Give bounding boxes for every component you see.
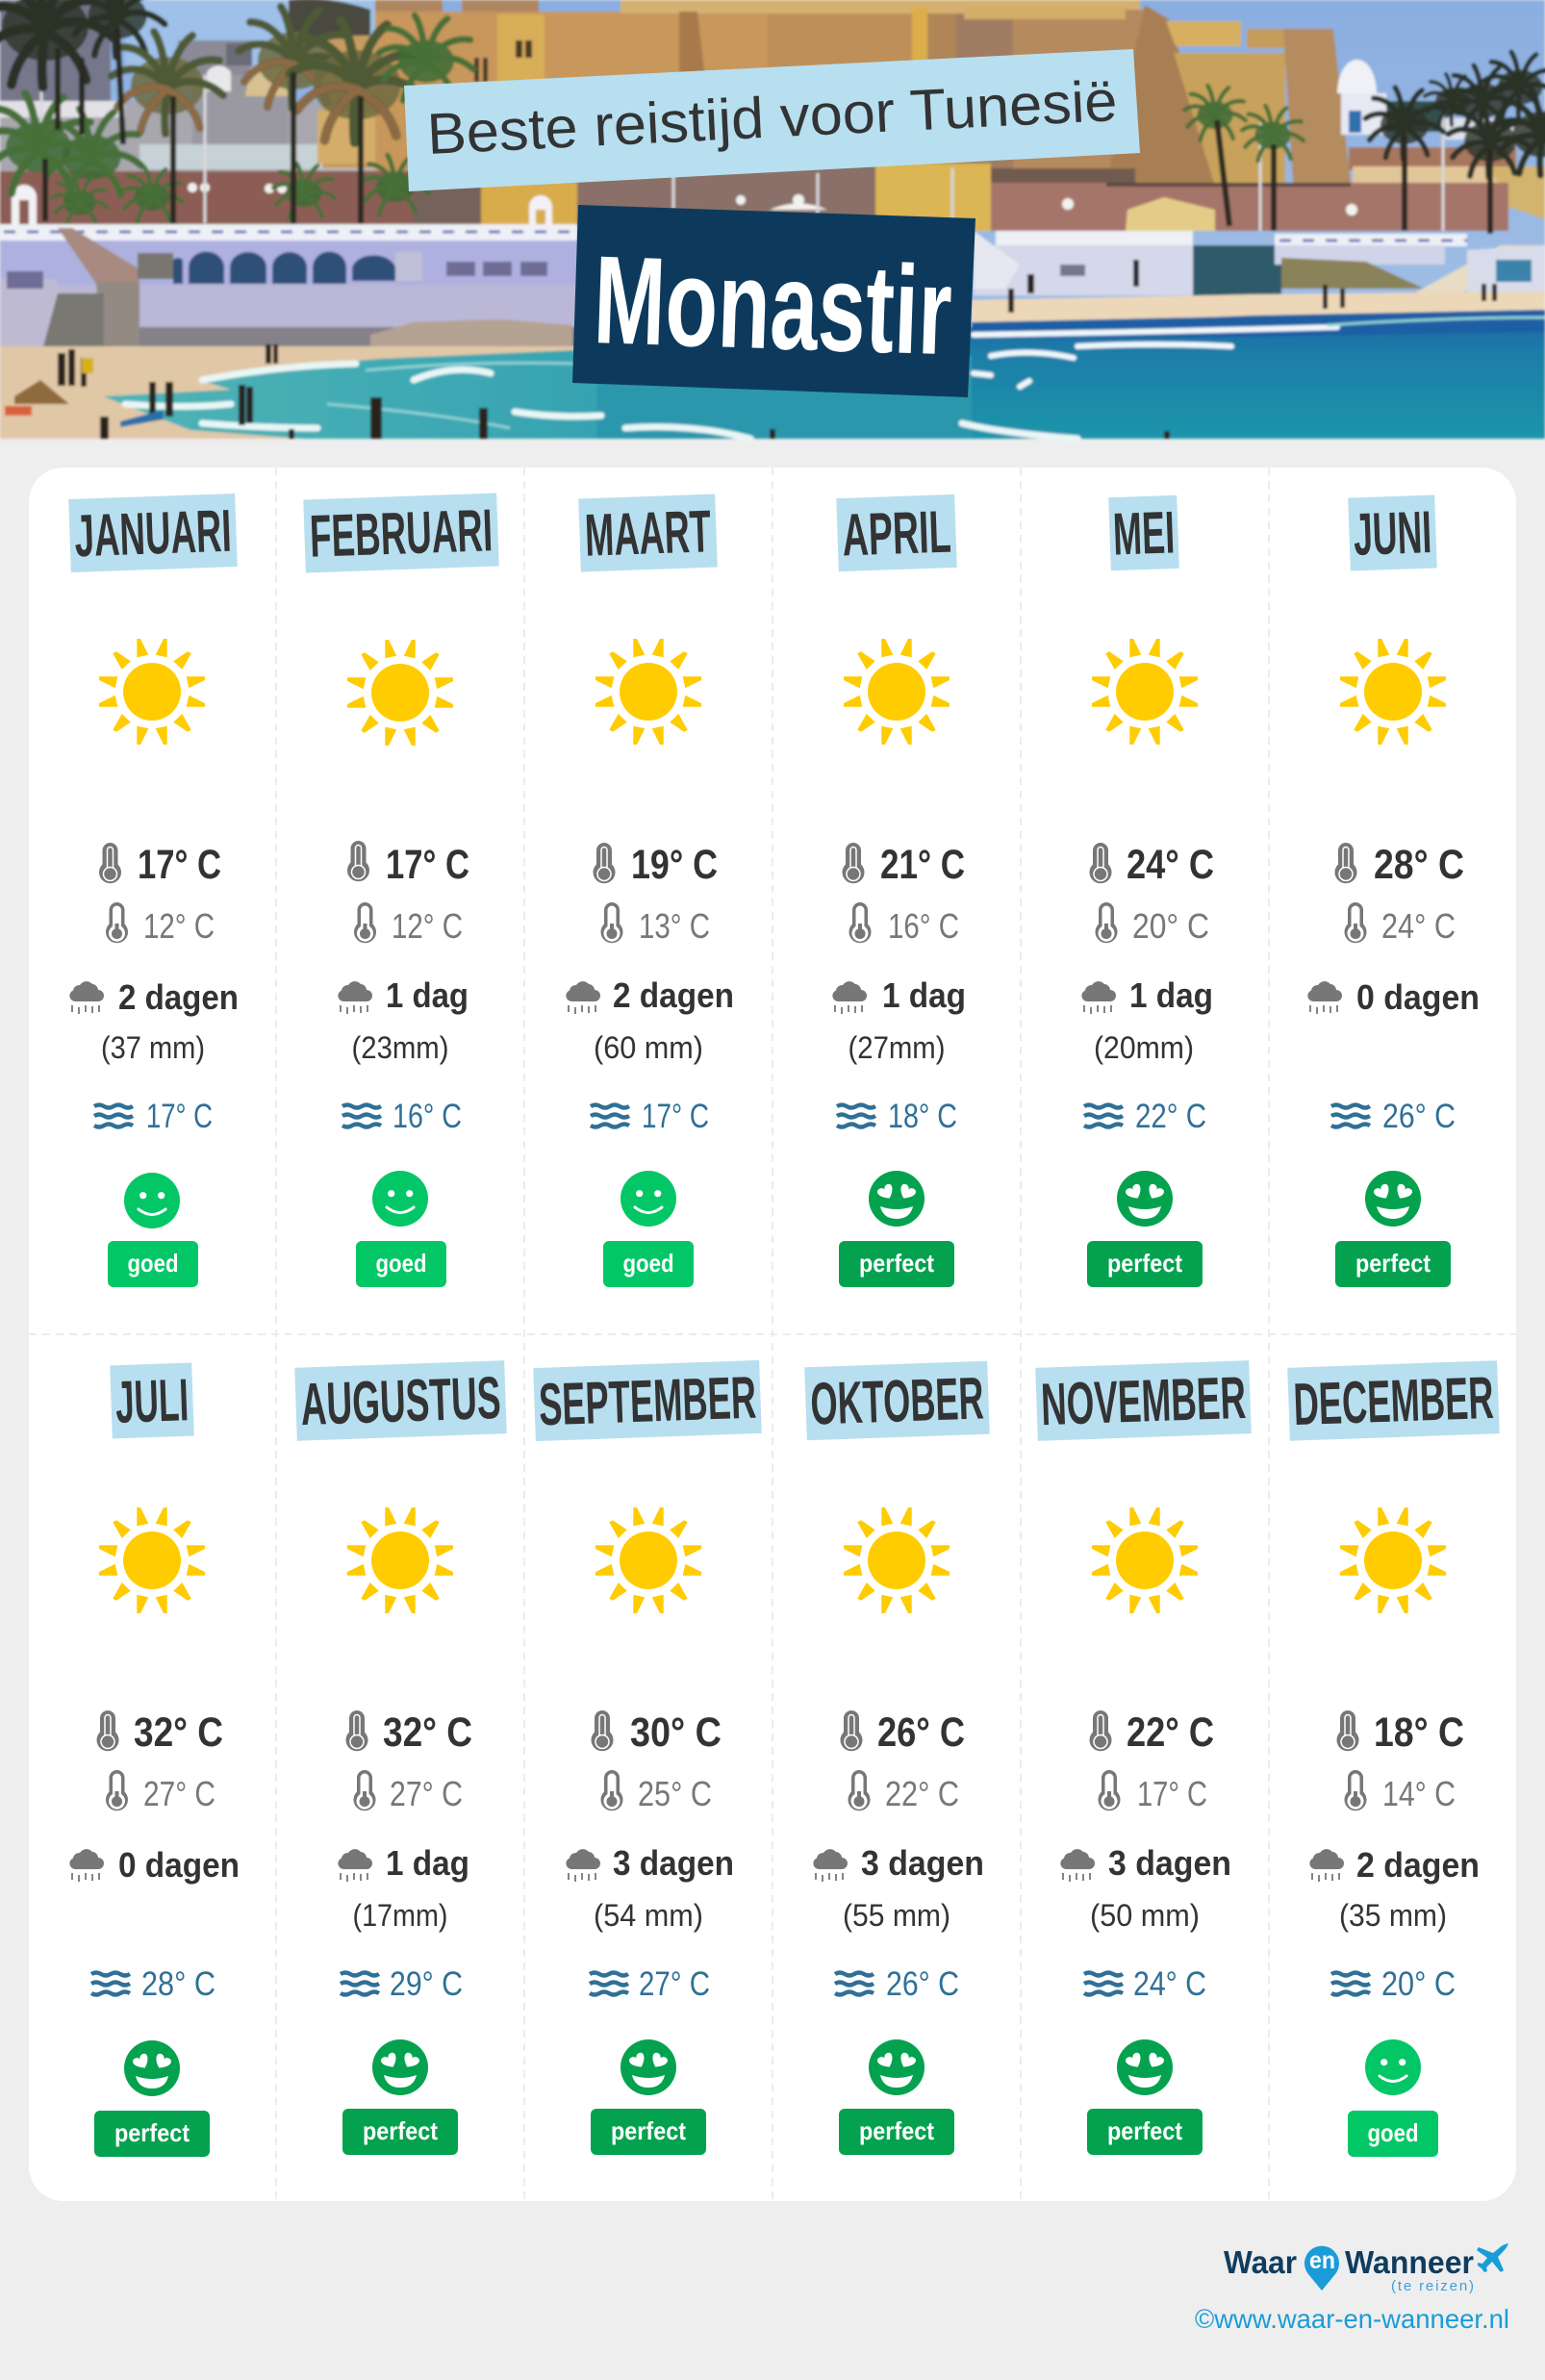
heading: januari: [68, 494, 238, 572]
maximum temperature: [1089, 842, 1214, 888]
panel: climate calendar card: [29, 468, 1516, 2201]
rain days: [1060, 1843, 1231, 1883]
rain days: 3 dagen: [861, 1843, 984, 1883]
sea temperature: 22° C: [1135, 1098, 1206, 1135]
minimum temperature: 27° C: [390, 1774, 463, 1813]
rating badge: perfect: [1107, 1249, 1182, 1278]
minimum temperature: [600, 1770, 712, 1813]
rainfall: (55 mm): [843, 1898, 950, 1933]
copyright link: ©www.waar-en-wanneer.nl: [1195, 2304, 1509, 2334]
rating badge: goed: [623, 1249, 673, 1278]
rain days: [832, 975, 966, 1015]
logo: Waar en Wanneer: (te reizen): [1391, 2278, 1474, 2294]
rating badge: [1087, 1241, 1203, 1287]
maximum temperature: 17° C: [138, 842, 221, 888]
heading: september: [533, 1360, 762, 1441]
icon: airplane: [1477, 2243, 1508, 2272]
location banner: [572, 205, 975, 397]
rainfall: (27mm): [848, 1030, 945, 1065]
rating badge: [839, 1241, 954, 1287]
figures: [58, 274, 1497, 439]
icon: map pin: [1304, 2246, 1339, 2291]
maximum temperature: [593, 842, 718, 888]
heading: maart: MAART: [584, 498, 712, 570]
icon: sun: [1340, 639, 1446, 745]
rain days: 0 dagen: [1356, 977, 1480, 1017]
rain days: 1 dag: [1129, 975, 1213, 1015]
maximum temperature: [1337, 1709, 1464, 1756]
sea temperature: [1084, 1098, 1206, 1135]
sea temperature: 18° C: [888, 1098, 957, 1135]
month: december: [1287, 1360, 1500, 2157]
sea temperature: 26° C: [1382, 1098, 1456, 1135]
maximum temperature: 21° C: [880, 842, 965, 888]
heading: mei: [1108, 495, 1179, 570]
rainfall: (35 mm): [1339, 1898, 1447, 1933]
month: september: [533, 1360, 762, 2155]
icon: perfect smiley: [372, 2039, 428, 2095]
minimum temperature: [106, 1770, 215, 1813]
minimum temperature: [848, 902, 959, 946]
minimum temperature: [1099, 1770, 1207, 1813]
sea temperature: [591, 1098, 709, 1135]
month: mei: [1081, 495, 1214, 1287]
maximum temperature: [96, 1709, 223, 1756]
logo: Waar en Wanneer: Wanneer: [1345, 2244, 1474, 2280]
icon: sun: [347, 640, 453, 746]
sea temperature: 16° C: [393, 1098, 462, 1135]
icon: good smiley: [124, 1173, 180, 1228]
rating badge: [1087, 2109, 1203, 2155]
rating badge: [839, 2109, 954, 2155]
rain days: [1081, 975, 1213, 1015]
minimum temperature: [354, 1770, 463, 1813]
month: januari: [68, 494, 239, 1287]
rainfall: (54 mm): [594, 1898, 703, 1933]
icon: sun: [347, 1507, 453, 1613]
maximum temperature: 28° C: [1374, 842, 1464, 888]
rating badge: [603, 1241, 694, 1287]
minimum temperature: 17° C: [1137, 1774, 1207, 1813]
right white wall: [974, 245, 1200, 295]
icon: perfect smiley: [869, 2039, 924, 2095]
heading: juni: JUNI: [1353, 499, 1432, 569]
heading: april: APRIL: [841, 499, 952, 569]
icon: sun: [595, 639, 701, 745]
icon: perfect smiley: [124, 2040, 180, 2096]
rain days: [566, 1843, 734, 1883]
month: november: [1035, 1360, 1252, 2155]
minimum temperature: [106, 902, 215, 946]
rainfall: (50 mm): [1090, 1898, 1200, 1933]
minimum temperature: 24° C: [1381, 906, 1456, 946]
minimum temperature: 13° C: [639, 906, 710, 946]
sea temperature: 17° C: [642, 1098, 709, 1135]
sea temperature: 28° C: [141, 1965, 215, 2003]
rating badge: perfect: [114, 2118, 190, 2147]
maximum temperature: [591, 1709, 722, 1756]
rating badge: [94, 2111, 210, 2157]
lavender sea wall: [0, 241, 577, 289]
month: oktober: [804, 1361, 990, 2155]
sea temperature: [590, 1965, 710, 2003]
minimum temperature: 25° C: [638, 1774, 712, 1813]
icon: sun: [1092, 639, 1198, 745]
maximum temperature: 17° C: [386, 842, 469, 888]
heading: augustus: [294, 1360, 507, 1441]
maximum temperature: 24° C: [1127, 842, 1214, 888]
icon: map pin: en: [1309, 2247, 1335, 2274]
rain days: [69, 977, 239, 1017]
fortress: [322, 36, 404, 168]
maximum temperature: [841, 1709, 965, 1756]
rating badge: perfect: [1107, 2116, 1182, 2145]
icon: perfect smiley: [621, 2039, 676, 2095]
sea temperature: 24° C: [1133, 1965, 1206, 2003]
sea temperature: [1331, 1965, 1456, 2003]
rain days: 2 dagen: [1356, 1845, 1480, 1885]
rating badge: perfect: [859, 1249, 934, 1278]
sea temperature: [342, 1098, 462, 1135]
logo: Waar en Wanneer: Waar: [1224, 2244, 1297, 2280]
rainfall: (37 mm): [101, 1030, 205, 1065]
sea: [596, 310, 1545, 439]
rating badge: [342, 2109, 458, 2155]
maximum temperature: 30° C: [630, 1709, 722, 1756]
rating badge: goed: [1368, 2118, 1418, 2147]
rain days: [813, 1843, 984, 1883]
heading: juli: [110, 1363, 194, 1438]
month: februari: [303, 494, 499, 1287]
minimum temperature: 20° C: [1132, 906, 1209, 946]
rating badge: perfect: [1355, 1249, 1431, 1278]
month: augustus: [294, 1360, 507, 2155]
rating badge: [356, 1241, 446, 1287]
rain days: 0 dagen: [118, 1845, 240, 1885]
heading: februari: FEBRUARI: [309, 497, 494, 570]
rating badge: goed: [127, 1249, 179, 1278]
maximum temperature: 32° C: [134, 1709, 223, 1756]
icon: sun: [844, 639, 950, 745]
sea temperature: 29° C: [390, 1965, 463, 2003]
minimum temperature: 14° C: [1382, 1774, 1456, 1813]
maximum temperature: [1089, 1709, 1214, 1756]
rain days: 2 dagen: [118, 977, 239, 1017]
icon: sun: [99, 1507, 205, 1613]
rain days: [566, 975, 734, 1015]
rain days: 1 dag: [386, 975, 469, 1015]
heading: november: NOVEMBER: [1040, 1365, 1247, 1438]
maximum temperature: [347, 841, 469, 888]
sea temperature: [341, 1965, 463, 2003]
icon: perfect smiley: [1117, 1171, 1173, 1227]
heading: september: SEPTEMBER: [538, 1365, 757, 1438]
location banner: Monastir: [592, 229, 954, 381]
icon: sun: [99, 639, 205, 745]
rain days: [338, 1843, 469, 1883]
sea temperature: [94, 1098, 213, 1135]
sea temperature: 26° C: [886, 1965, 959, 2003]
rain days: 1 dag: [882, 975, 966, 1015]
maximum temperature: [346, 1709, 472, 1756]
heading: augustus: AUGUSTUS: [299, 1365, 502, 1438]
heading: februari: [303, 494, 499, 572]
maximum temperature: 26° C: [877, 1709, 965, 1756]
maximum temperature: [843, 842, 965, 888]
rain days: 1 dag: [386, 1843, 469, 1883]
rating badge: perfect: [611, 2116, 686, 2145]
rainfall: (17mm): [352, 1898, 448, 1933]
icon: good smiley: [1365, 2039, 1421, 2095]
icon: perfect smiley: [1365, 1171, 1421, 1227]
rain days: [1309, 1845, 1480, 1885]
minimum temperature: 16° C: [888, 906, 959, 946]
icon: perfect smiley: [1117, 2039, 1173, 2095]
maximum temperature: 22° C: [1127, 1709, 1214, 1756]
minimum temperature: [848, 1770, 959, 1813]
rain days: 3 dagen: [1108, 1843, 1231, 1883]
heading: oktober: [804, 1361, 990, 1440]
minimum temperature: 27° C: [143, 1774, 215, 1813]
icon: sun: [595, 1507, 701, 1613]
minimum temperature: [600, 902, 710, 946]
icon: sun: [1340, 1507, 1446, 1613]
rainfall: (60 mm): [594, 1030, 703, 1065]
maximum temperature: 19° C: [631, 842, 718, 888]
icon: good smiley: [372, 1171, 428, 1227]
title banner: [404, 49, 1140, 191]
rating badge: [108, 1241, 198, 1287]
sea temperature: [91, 1965, 215, 2003]
minimum temperature: 12° C: [392, 906, 463, 946]
icon: sun: [1092, 1507, 1198, 1613]
heading: oktober: OKTOBER: [809, 1365, 985, 1438]
minimum temperature: [1345, 1770, 1456, 1813]
sea temperature: 17° C: [146, 1098, 213, 1135]
heading: januari: JANUARI: [73, 498, 233, 570]
month: juni: [1307, 494, 1480, 1287]
rain days: [338, 975, 469, 1015]
icon: sun: [844, 1507, 950, 1613]
rating badge: [1348, 2111, 1438, 2157]
icon: perfect smiley: [869, 1171, 924, 1227]
maximum temperature: 32° C: [383, 1709, 472, 1756]
lower terrace: [0, 171, 414, 224]
sea temperature: [837, 1098, 957, 1135]
rating badge: goed: [375, 1249, 427, 1278]
rating badge: [1335, 1241, 1451, 1287]
icon: good smiley: [621, 1171, 676, 1227]
rating badge: perfect: [859, 2116, 934, 2145]
minimum temperature: [1095, 902, 1209, 946]
logo: Waar en Wanneer: [1224, 2243, 1508, 2294]
minimum temperature: [1345, 902, 1456, 946]
sea temperature: [835, 1965, 959, 2003]
minimum temperature: [354, 902, 463, 946]
maximum temperature: [1335, 842, 1464, 888]
heading: juli: JULI: [114, 1367, 190, 1436]
heading: juni: [1348, 494, 1437, 571]
sea temperature: 27° C: [639, 1965, 710, 2003]
rating badge: [591, 2109, 706, 2155]
month: maart: [566, 494, 734, 1287]
heading: april: [836, 494, 957, 571]
maximum temperature: [99, 842, 221, 888]
minimum temperature: 12° C: [143, 906, 215, 946]
rainfall: (20mm): [1094, 1030, 1194, 1065]
sea temperature: [1331, 1098, 1456, 1135]
sea temperature: 20° C: [1381, 1965, 1456, 2003]
month: juli: [69, 1363, 240, 2157]
rating badge: perfect: [363, 2116, 438, 2145]
title banner: Beste reistijd voor Tunesië: [425, 68, 1119, 166]
photo: Monastir ribat and beach: [0, 0, 1545, 439]
heading: maart: [578, 494, 718, 571]
rain days: [69, 1845, 240, 1885]
rain days: 2 dagen: [613, 975, 734, 1015]
beaches: [0, 346, 596, 439]
heading: november: [1035, 1360, 1252, 1441]
heading: mei: MEI: [1112, 499, 1176, 569]
minimum temperature: 22° C: [885, 1774, 959, 1813]
rain days: 3 dagen: [613, 1843, 734, 1883]
sea temperature: [1084, 1965, 1206, 2003]
maximum temperature: 18° C: [1374, 1709, 1464, 1756]
rainfall: (23mm): [352, 1030, 448, 1065]
balustrade: [0, 224, 1467, 246]
month: april: [832, 494, 966, 1287]
rain days: [1307, 977, 1480, 1017]
